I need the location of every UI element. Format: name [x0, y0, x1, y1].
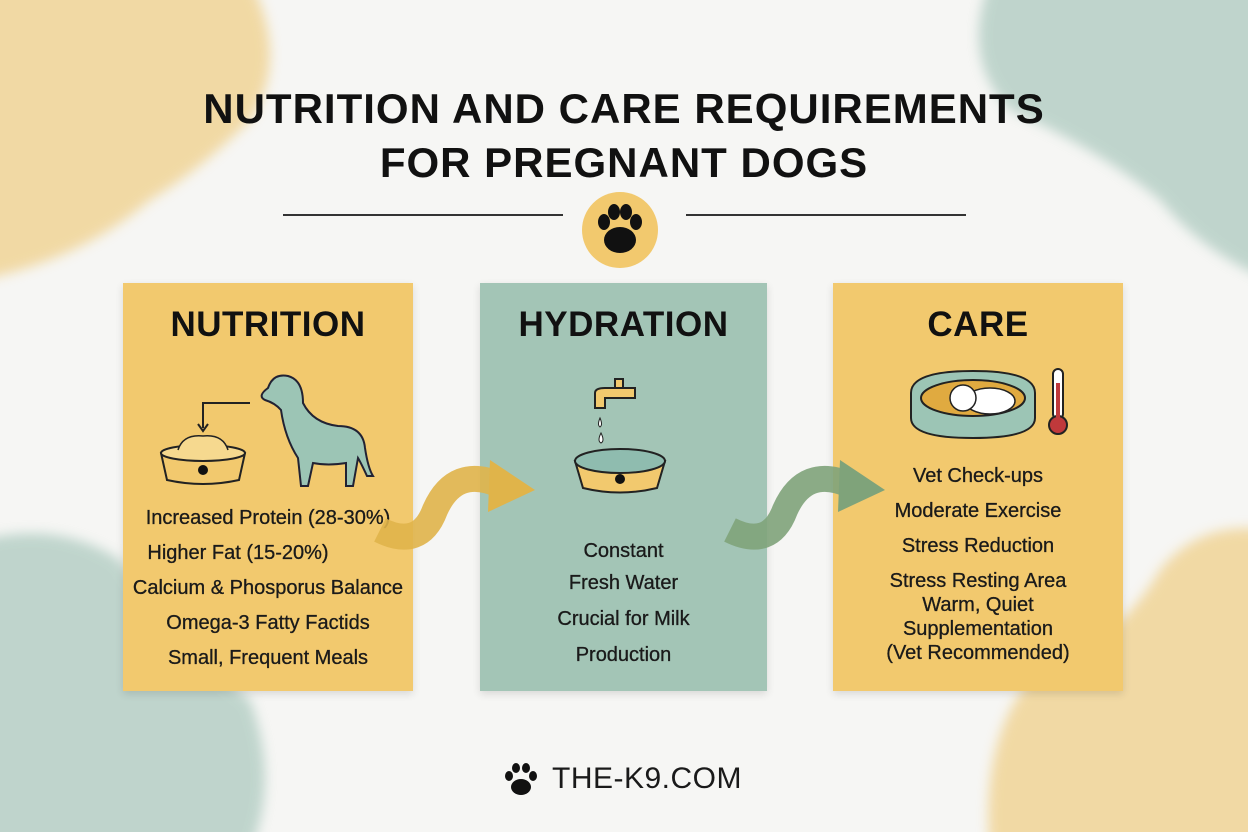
text: nutrition list: Calcium & Phosporus Balance [133, 577, 403, 599]
text: care list: (Vet Recommended) [886, 642, 1070, 664]
text: hydration [557, 540, 690, 666]
icon: dog bed and thermometer [910, 368, 1068, 439]
panel: hydration [480, 283, 767, 691]
text: care list [886, 465, 1070, 664]
arrow: nutrition to hydration [374, 460, 535, 550]
text: nutrition list [133, 507, 403, 669]
text: hydration: Production [576, 644, 671, 666]
text: care list: Supplementation [903, 618, 1053, 640]
text: hydration: Fresh Water [569, 572, 678, 594]
icon: faucet and water bowl [574, 378, 666, 494]
text: care list: Stress Resting Area [890, 570, 1066, 592]
title [203, 85, 1045, 186]
text: nutrition list: Small, Frequent Meals [168, 647, 368, 669]
heading: hydration: HYDRATION [519, 305, 728, 344]
text: care list: Stress Reduction [902, 535, 1054, 557]
text: hydration: Crucial for Milk [557, 608, 690, 630]
panel: care [833, 283, 1123, 691]
footer logo: THE-K9.COM [552, 762, 742, 795]
text: care list: Moderate Exercise [895, 500, 1061, 522]
text: care list: Vet Check-ups [913, 465, 1043, 487]
icon: dog and bowl [160, 374, 375, 487]
heading: care: CARE [927, 305, 1029, 344]
panel: nutrition [123, 283, 413, 691]
text: nutrition list: Higher Fat (15-20%) [147, 542, 329, 564]
title: NUTRITION AND CARE REQUIREMENTS [203, 85, 1045, 132]
divider with paw icon [283, 192, 966, 268]
text: nutrition list: Increased Protein (28-30%) [146, 507, 390, 529]
heading: nutrition: NUTRITION [170, 305, 366, 344]
text: hydration: Constant [583, 540, 664, 562]
text: care list: Warm, Quiet [922, 594, 1034, 616]
title: FOR PREGNANT DOGS [380, 139, 868, 186]
arrow: hydration to care [724, 460, 885, 550]
text: nutrition list: Omega-3 Fatty Factids [166, 612, 370, 634]
